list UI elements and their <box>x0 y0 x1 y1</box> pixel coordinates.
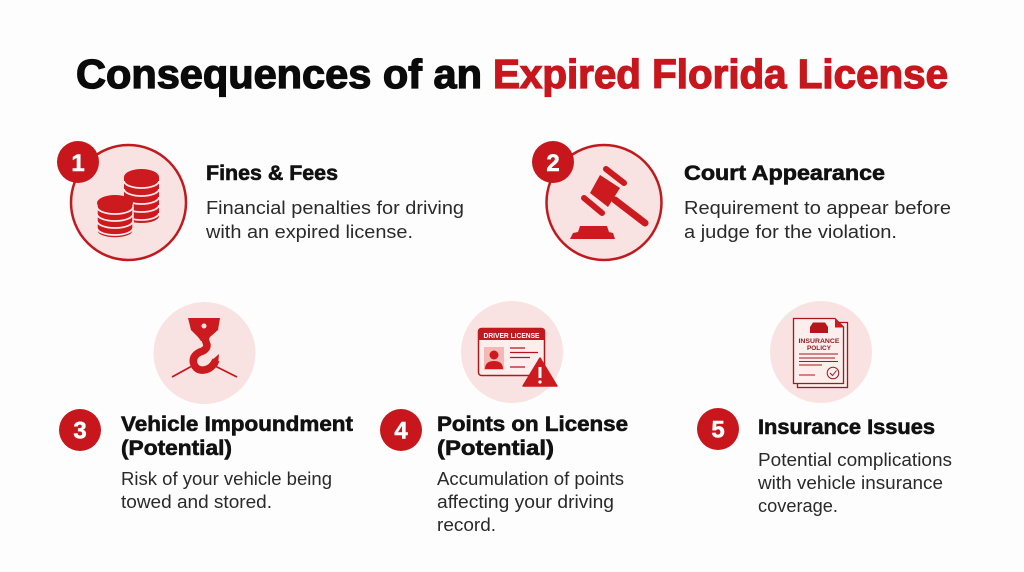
text: insurance description: Potential complications <box>758 449 952 470</box>
title: Expired Florida License <box>493 51 948 97</box>
heading: court appearance: Court Appearance <box>684 162 885 185</box>
heading: vehicle impoundment <box>121 413 353 460</box>
number badge 3 <box>59 409 101 451</box>
heading: vehicle impoundment: Vehicle Impoundment <box>121 413 353 436</box>
title <box>76 51 948 97</box>
number badge 2: 2 <box>546 150 560 177</box>
text: court description: Requirement to appear before <box>684 197 951 218</box>
icon: driver license with warning <box>461 301 563 403</box>
title: Consequences of an <box>76 51 482 97</box>
panel: fines and fees <box>57 141 464 260</box>
panel: court appearance <box>532 141 951 260</box>
number badge 2 <box>532 141 574 183</box>
icon: gavel <box>546 145 662 260</box>
icon: insurance policy document: POLICY <box>807 345 831 352</box>
text: insurance description: with vehicle insurance <box>757 472 943 493</box>
heading: points on license <box>437 413 628 460</box>
text: impoundment description <box>121 468 332 512</box>
text: fines description <box>205 197 464 242</box>
icon: insurance policy document <box>770 301 872 403</box>
panel: vehicle impoundment <box>59 302 353 512</box>
number badge 5: 5 <box>711 416 725 444</box>
icon: tow hook <box>154 302 256 404</box>
panel: points on license <box>380 301 628 535</box>
number badge 1: 1 <box>71 150 85 177</box>
text: court description: a judge for the violation. <box>684 221 897 242</box>
heading: points on license: Points on License <box>437 413 628 436</box>
text: insurance description: coverage. <box>758 495 838 516</box>
heading: insurance issues: Insurance Issues <box>758 416 935 439</box>
text: points description: Accumulation of points <box>437 468 624 489</box>
number badge 4: 4 <box>394 418 408 444</box>
text: insurance description <box>757 449 952 516</box>
icon: driver license with warning: DRIVER LICENSE <box>484 331 540 340</box>
text: points description <box>437 468 624 535</box>
number badge 5 <box>697 408 739 450</box>
text: fines description: Financial penalties for driving <box>206 197 464 218</box>
text: points description: record. <box>437 514 496 535</box>
heading: fines and fees: Fines & Fees <box>206 162 338 185</box>
icon: coin stacks <box>71 145 186 260</box>
number badge 3: 3 <box>73 418 87 444</box>
icon: insurance policy document: INSURANCE <box>798 338 840 345</box>
text: impoundment description: towed and stored. <box>121 491 272 512</box>
text: fines description: with an expired license. <box>205 221 413 242</box>
panel: insurance issues <box>697 301 952 516</box>
text: court description <box>684 197 951 242</box>
number badge 4 <box>380 409 422 451</box>
text: points description: affecting your driving <box>437 491 614 512</box>
heading: points on license: (Potential) <box>437 437 554 460</box>
number badge 1 <box>57 141 99 183</box>
text: impoundment description: Risk of your vehicle being <box>121 468 332 489</box>
heading: vehicle impoundment: (Potential) <box>121 437 232 460</box>
